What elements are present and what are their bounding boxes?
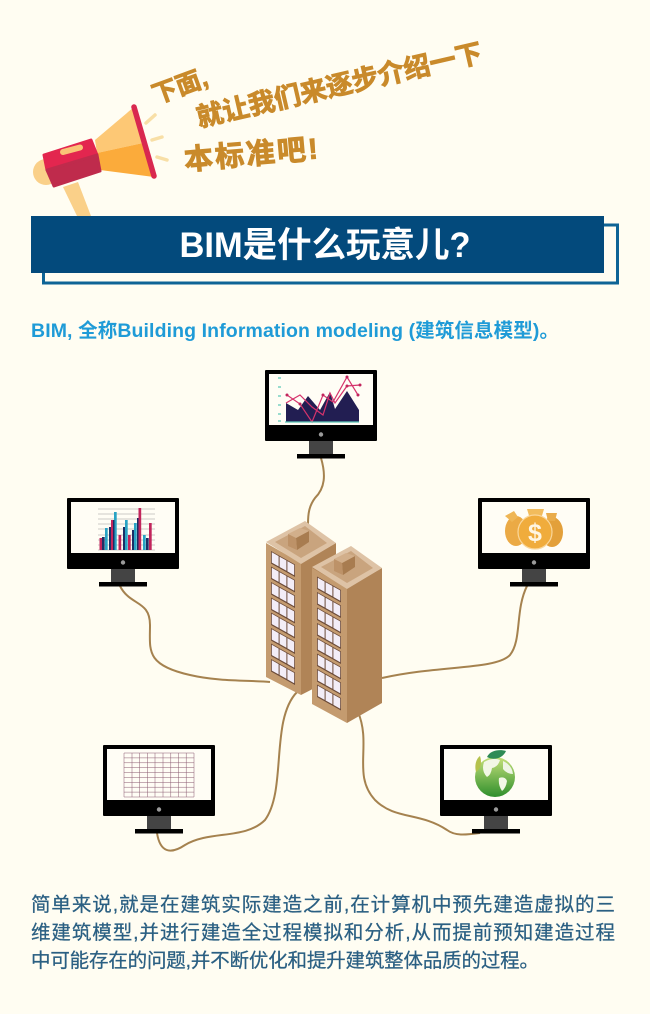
yellow leaf: [475, 756, 481, 772]
globe: [475, 757, 515, 797]
tower 1: [266, 521, 336, 695]
speech text: 下面: 下面,: [148, 64, 212, 110]
area chart: [286, 391, 359, 422]
table grid: [124, 753, 194, 797]
subtitle: BIM, 全称Building Information modeling (建筑信息模型)。: [31, 319, 559, 342]
monitor: top area and line chart: [265, 370, 377, 458]
leaf: [487, 750, 506, 759]
grid lines: [98, 509, 155, 550]
monitor: bottom-left table: [103, 745, 215, 834]
center bag: [518, 515, 552, 549]
monitor: bottom-right globe: [440, 745, 552, 834]
icon: megaphone: [33, 107, 167, 216]
dollar sign: $: [528, 519, 542, 547]
paragraph: 中可能存在的问题,并不断优化和提升建筑整体品质的过程。: [31, 950, 539, 972]
heading banner: [31, 216, 618, 283]
speech text: 就让我们来逐步介绍一下: 就让我们来逐步介绍一下: [194, 38, 485, 133]
right bag: [541, 517, 563, 547]
line series: [286, 377, 360, 422]
heading title: BIM是什么玩意儿?: [180, 226, 470, 265]
monitor: right money bags: [478, 498, 590, 586]
paragraph: 简单来说,就是在建筑实际建造之前,在计算机中预先建造虚拟的三: [31, 894, 615, 916]
tower 2: [312, 546, 382, 723]
speech text: 本标准吧: 本标准吧!: [183, 132, 319, 177]
bag neck: [527, 509, 544, 519]
connecting wires: [120, 458, 527, 851]
paragraph: [31, 894, 615, 972]
building: twin towers: [266, 521, 382, 723]
paragraph: 维建筑模型,并进行建造全过程模拟和分析,从而提前预知建造过程: [31, 922, 615, 944]
monitor: left bar chart: [67, 498, 179, 586]
left bag: [505, 516, 527, 546]
chart axis: [278, 378, 359, 422]
bars: [100, 508, 152, 550]
